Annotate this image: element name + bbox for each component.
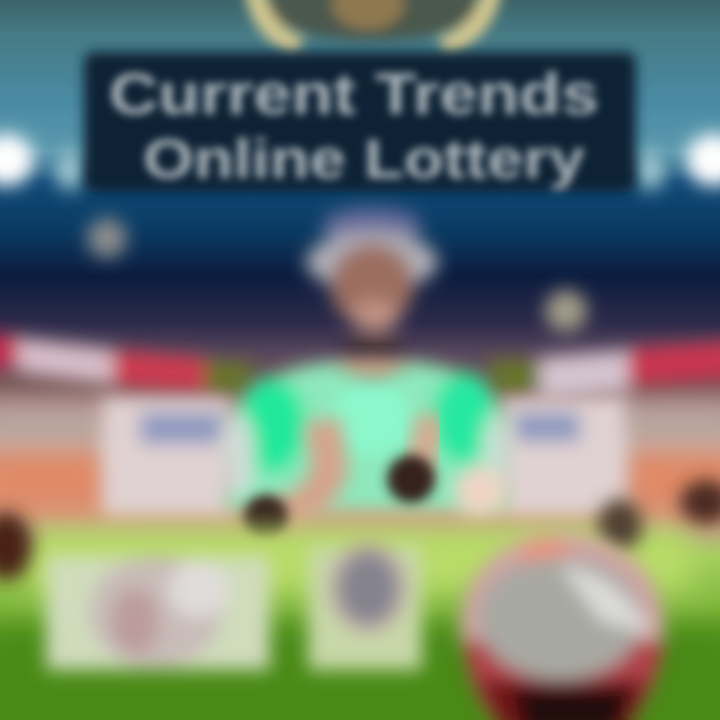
floating balls in stands [87, 218, 587, 332]
title text [109, 62, 599, 190]
ticket panel: right [504, 398, 626, 516]
player neck [330, 359, 414, 385]
ticket panel: left [102, 398, 230, 516]
title text: Current Trends [109, 62, 599, 127]
right edge hand [598, 480, 720, 551]
stadium lights [0, 134, 720, 190]
banner: left [0, 335, 250, 392]
gold emblem at top [254, 0, 492, 48]
grass field [0, 530, 720, 720]
left edge ball [0, 512, 32, 580]
title text: Online Lottery [143, 127, 585, 190]
player shirt [222, 362, 510, 510]
player arms and hands [244, 415, 506, 539]
banner: right [490, 340, 720, 400]
player head [306, 208, 438, 354]
ticket card: center [308, 542, 422, 670]
title plate [84, 52, 636, 192]
large soccer ball [460, 533, 664, 720]
player [222, 208, 510, 539]
ticket card: left [46, 556, 270, 670]
seating bands [0, 408, 720, 510]
